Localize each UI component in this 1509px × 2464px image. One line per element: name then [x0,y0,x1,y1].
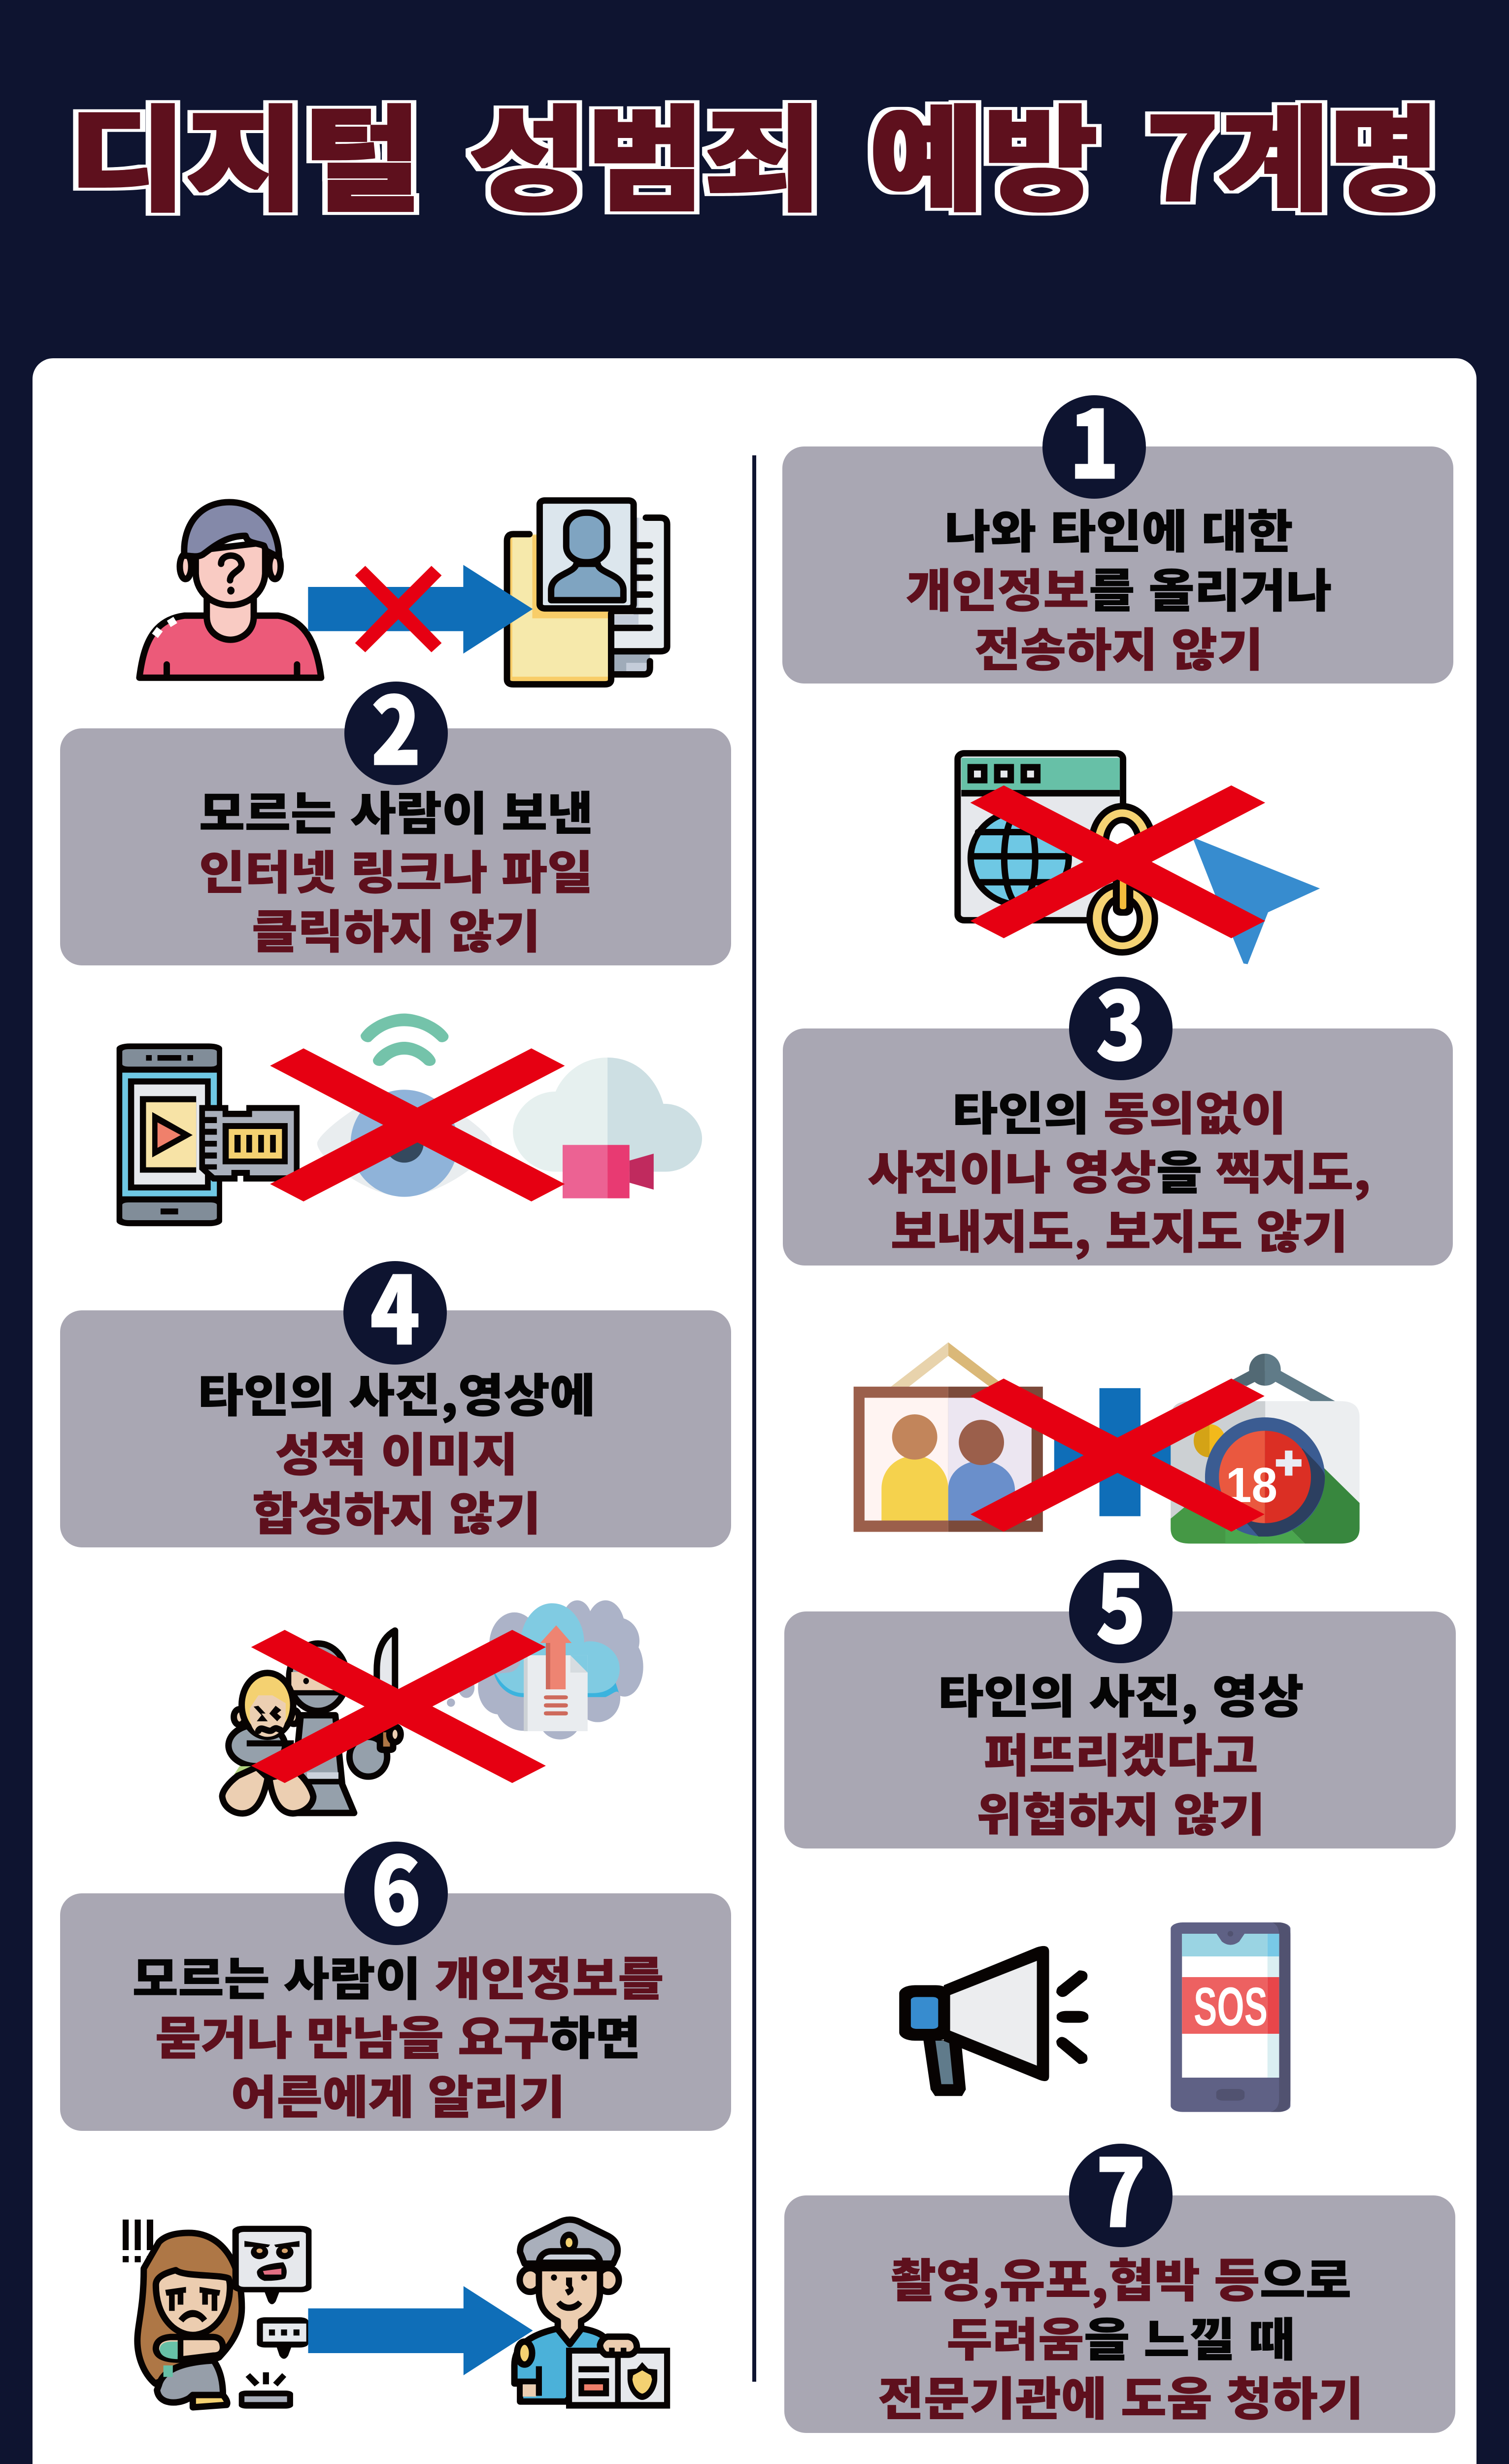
icon: distressed girl, arrow, police officer [123,2220,670,2409]
step 6 text [133,1942,664,2127]
step 5 text: 타인의 사진, 영상 [938,1660,1304,1726]
step 5 text: 퍼뜨리겠다고 [983,1719,1258,1785]
step 2 text: 모르는 사람이 보낸 [199,777,593,843]
step 6 text: 묻거나 만남을 요구하면 [155,2001,641,2068]
step 4 text [198,1359,596,1543]
number badge 5 [1069,1535,1173,1669]
step 7 text [878,2244,1364,2429]
number badge 3 [1069,952,1173,1086]
number badge 4: 4 [370,1236,420,1370]
step 4 text: 타인의 사진,영상에 [198,1359,596,1425]
number badge 2: 2 [371,657,421,791]
step 6 text: 모르는 사람이 개인정보를 [133,1942,664,2009]
center divider [752,455,756,2382]
number badge 5: 5 [1096,1535,1145,1669]
icon: attacker holding victim and cloud upload, crossed out [222,1600,643,1814]
number badge 2 [344,657,448,791]
step 2 panel [60,657,731,965]
red cross over adult image icon [971,1378,1265,1532]
step 2 text: 클릭하지 않기 [252,895,540,961]
number badge 3: 3 [1096,952,1145,1086]
step 3 text [868,1077,1371,1262]
number badge 6: 6 [371,1817,421,1951]
step 2 text [199,777,593,961]
number badge 6 [344,1817,448,1951]
step 7 text: 촬영,유포,협박 등으로 [890,2244,1351,2310]
step 7 panel [784,2119,1455,2433]
step 7 text: 두려움을 느낄 때 [947,2303,1295,2369]
icon: framed photo and adult image, crossed out [854,1342,1360,1543]
number badge 1 [1042,371,1146,505]
icon: phone, memory card, eye, cloud camera, crossed out [117,1014,702,1226]
step 5 panel [784,1535,1456,1848]
step 3 text: 타인의 동의없이 [952,1077,1286,1143]
title: 7계명 [1146,68,1439,234]
number badge 4 [343,1236,447,1370]
step 5 text: 위협하지 않기 [976,1778,1265,1845]
title: 예방 [870,68,1098,234]
step 2 text: 인터넷 링크나 파일 [199,836,593,902]
step 1 text: 전송하지 않기 [974,613,1263,680]
step 7 text: 전문기관에 도움 청하기 [878,2362,1364,2429]
title: 디지털 [68,68,421,234]
step 3 text: 사진이나 영상을 찍지도, [868,1136,1371,1202]
step 5 text [938,1660,1304,1845]
step 6 panel [60,1817,731,2131]
number badge 7 [1069,2119,1173,2253]
step 1 text: 개인정보를 올리거나 [906,554,1332,620]
title: 성범죄 [469,68,822,234]
icon: web link and send arrow, crossed out [958,753,1320,964]
step 3 text: 보내지도, 보지도 않기 [891,1195,1348,1262]
icon: person sending personal documents, crossed out [139,501,667,684]
SOS label: SOS [1194,1977,1268,2037]
step 3 panel [783,952,1453,1266]
title [68,68,1439,234]
icon label: 18: 18 [1226,1458,1277,1513]
step 4 text: 성적 이미지 [275,1418,518,1484]
number badge 1: 1 [1070,371,1119,505]
icon: megaphone and SOS phone [899,1922,1290,2112]
step 4 text: 합성하지 않기 [252,1477,541,1543]
step 1 panel [782,371,1453,684]
step 6 text: 어른에게 알리기 [231,2060,565,2127]
step 1 text: 나와 타인에 대한 [945,495,1293,561]
number badge 7: 7 [1096,2119,1145,2253]
step 1 text [906,495,1332,680]
step 4 panel [60,1236,731,1547]
